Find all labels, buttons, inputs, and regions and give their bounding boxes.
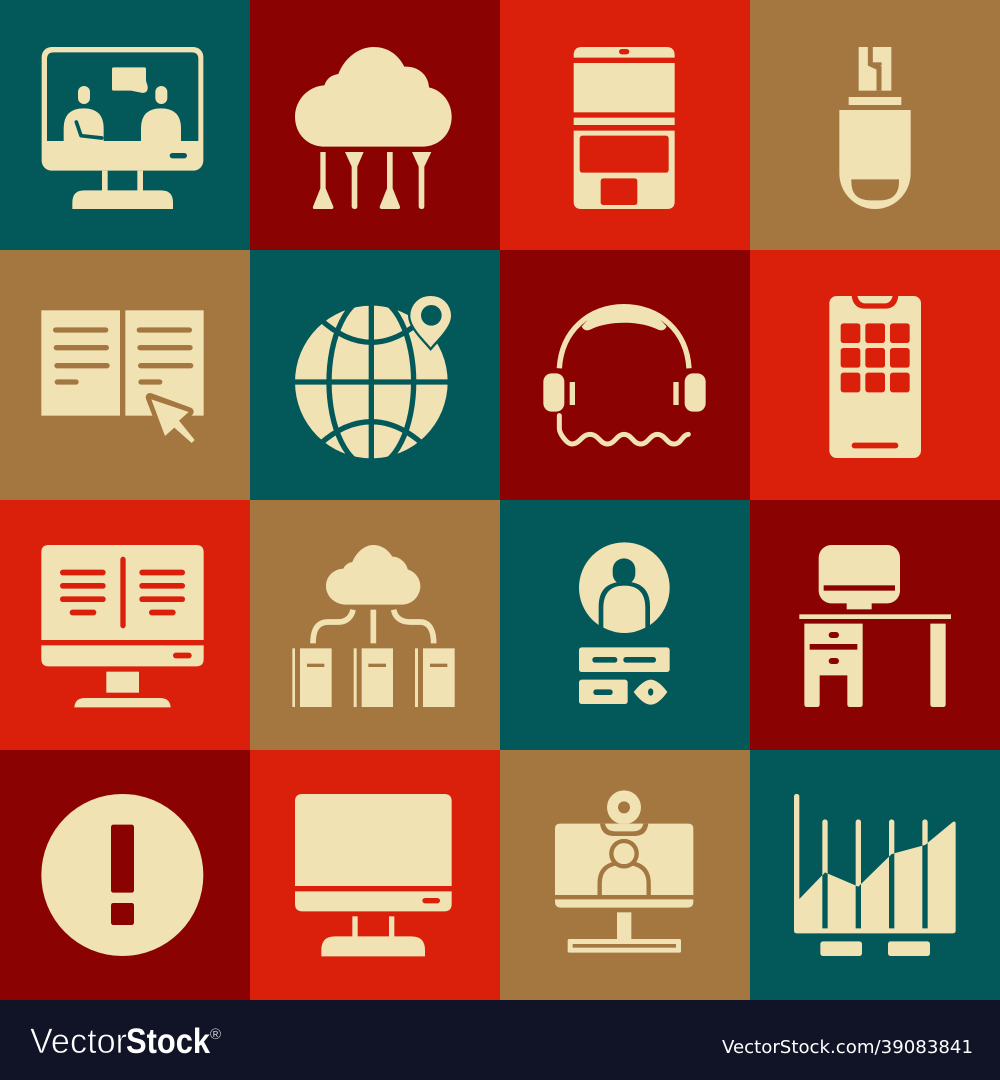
icon: cloud linked to three servers [292,545,455,707]
logo: VectorStock: Vector [30,1022,127,1061]
icon: USB stick [839,47,911,209]
tile: headset [500,250,750,500]
tile: area chart [750,750,1000,1000]
icon: monitor [295,794,452,956]
icon: monitor with text columns [41,545,204,707]
icon: location pin [410,295,451,347]
icon: desk with monitor [799,545,951,707]
tile: computer desk [750,500,1000,750]
tile: cloud servers [250,500,500,750]
icon: globe [293,295,451,467]
footer bar [0,1000,1000,1080]
logo: VectorStock: ® [210,1026,221,1043]
tile: desktop monitor [250,750,500,1000]
tile: globe with location pin [250,250,500,500]
icon: avatar with form fields and eye [579,542,670,705]
icon: exclamation circle [41,794,203,956]
tile: online book with cursor [0,250,250,500]
tile: e-book on monitor [0,500,250,750]
footer image id: VectorStock.com/39083841 [722,1037,973,1058]
icon: webcam on monitor with person [555,790,693,953]
logo: VectorStock: Stock [126,1022,210,1061]
tile: warning alert [0,750,250,1000]
icon: monitor with two people [42,47,203,209]
logo: VectorStock [30,1022,221,1061]
icon: headset with wavy cable [543,304,706,444]
icon: open book and arrow cursor [41,310,204,443]
tile: USB flash drive [750,0,1000,250]
chart: area chart with bars [794,794,956,956]
icon: folding device [574,47,675,209]
icon: cloud with four prongs [295,47,452,209]
tile: cloud with connectors [250,0,500,250]
tile: video conference monitor [0,0,250,250]
tile: foldable laptop phone [500,0,750,250]
tile: webcam video call [500,750,750,1000]
tile: user profile [500,500,750,750]
tile: smartphone with apps [750,250,1000,500]
icon: phone with app grid [829,296,921,458]
